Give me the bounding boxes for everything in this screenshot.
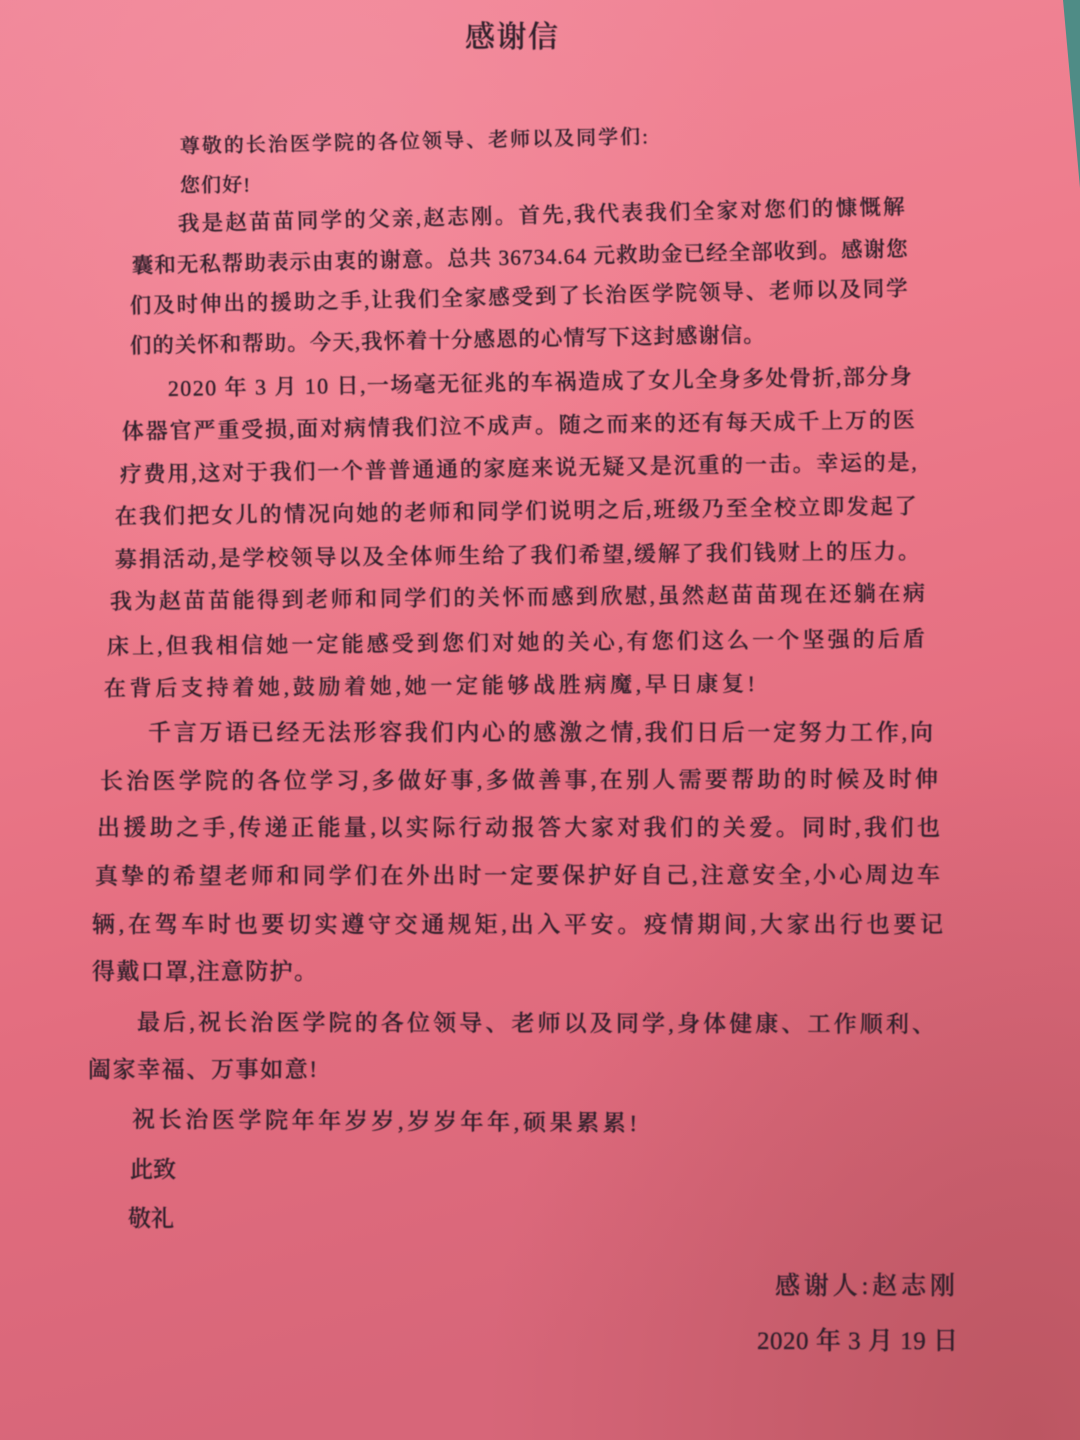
paragraph 1: 们的关怀和帮助。今天,我怀着十分感恩的心情写下这封感谢信。 [130,323,765,358]
paragraph 1: 囊和无私帮助表示由衷的谢意。总共 36734.64 元救助金已经全部收到。感谢您 [132,237,909,278]
paragraph 3 [92,720,943,984]
paragraph 2: 2020 年 3 月 10 日,一场毫无征兆的车祸造成了女儿全身多处骨折,部分身 [168,364,912,401]
salutation: 尊敬的长治医学院的各位领导、老师以及同学们: [180,124,648,158]
signature: 2020 年 3 月 19 日 [757,1327,958,1355]
paragraph 3: 长治医学院的各位学习,多做好事,多做善事,在别人需要帮助的时候及时伸 [100,767,938,794]
paragraph 3: 千言万语已经无法形容我们内心的感激之情,我们日后一定努力工作,向 [148,720,933,745]
title: 感谢信 [465,21,558,54]
paragraph 2: 床上,但我相信她一定能感受到您们对她的关心,有您们这么一个坚强的后盾 [107,626,925,659]
paragraph 2: 募捐活动,是学校领导以及全体师生给了我们希望,缓解了我们钱财上的压力。 [115,539,920,572]
paragraph 2: 我为赵苗苗能得到老师和同学们的关怀而感到欣慰,虽然赵苗苗现在还躺在病 [110,580,925,614]
paragraph 2: 在背后支持着她,鼓励着她,她一定能够战胜病魔,早日康复! [104,671,755,701]
paragraph 1: 们及时伸出的援助之手,让我们全家感受到了长治医学院领导、老师以及同学 [130,276,908,318]
paragraph 4 [88,1010,935,1082]
blessing: 祝长治医学院年年岁岁,岁岁年年,硕果累累! [132,1107,637,1136]
paragraph 2: 在我们把女儿的情况向她的老师和同学们说明之后,班级乃至全校立即发起了 [115,494,917,529]
salutation: 您们好! [180,173,250,197]
paragraph 2: 疗费用,这对于我们一个普普通通的家庭来说无疑又是沉重的一击。幸运的是, [120,449,917,487]
paragraph 3: 辆,在驾车时也要切实遵守交通规矩,出入平安。疫情期间,大家出行也要记 [92,912,943,937]
signature: 感谢人:赵志刚 [775,1272,955,1300]
paragraph 2: 体器官严重受损,面对病情我们泣不成声。随之而来的还有每天成千上万的医 [122,407,915,444]
paragraph 1: 我是赵苗苗同学的父亲,赵志刚。首先,我代表我们全家对您们的慷慨解 [178,195,905,236]
closing: 敬礼 [128,1206,174,1231]
paragraph 3: 真挚的希望老师和同学们在外出时一定要保护好自己,注意安全,小心周边车 [95,863,940,889]
paragraph 2 [104,364,925,701]
paragraph 4: 最后,祝长治医学院的各位领导、老师以及同学,身体健康、工作顺利、 [137,1010,935,1037]
paragraph 3: 出援助之手,传递正能量,以实际行动报答大家对我们的关爱。同时,我们也 [97,815,940,840]
closing [128,1157,176,1231]
salutation [180,124,648,197]
paragraph 3: 得戴口罩,注意防护。 [92,959,317,984]
paragraph 4: 阖家幸福、万事如意! [88,1057,317,1082]
signature [757,1272,958,1355]
paragraph 1 [130,195,909,358]
closing: 此致 [130,1157,176,1182]
